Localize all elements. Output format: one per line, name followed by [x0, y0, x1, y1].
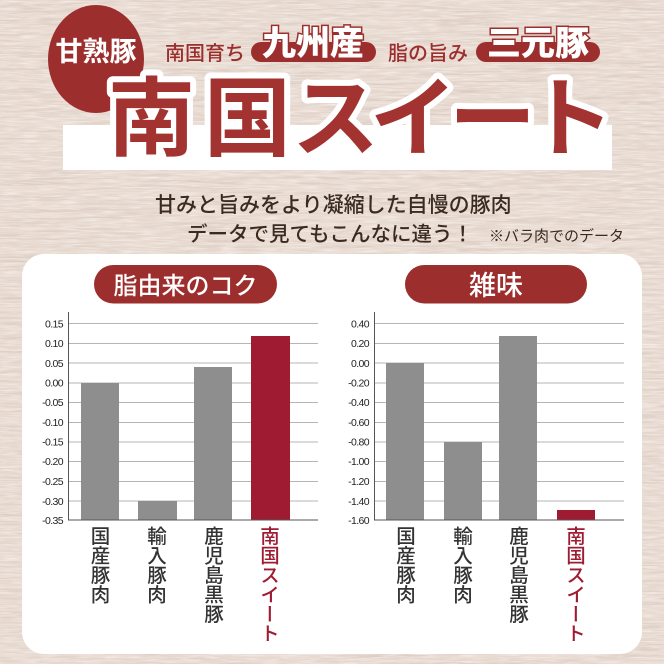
badge: 甘熟豚 [48, 5, 144, 113]
y axis labels: -0.60 [348, 417, 370, 429]
panel: charts card [22, 254, 642, 654]
x axis labels: 鹿児島黒豚 [504, 526, 534, 624]
y axis labels: -1.00 [348, 456, 370, 468]
x axis labels [392, 526, 590, 643]
x axis labels: 国産豚肉 [392, 526, 420, 604]
heading pill: 雑味: 雑味 [469, 264, 523, 303]
y axis labels: 0.20 [351, 338, 370, 350]
title: 南国スイート: 南国スイート [108, 49, 614, 175]
lead text: ※バラ肉でのデータ [489, 225, 624, 246]
y axis labels: -0.25 [42, 476, 64, 488]
y axis labels: 0.00 [351, 358, 370, 370]
x axis labels: 鹿児島黒豚 [200, 526, 228, 624]
x axis labels: 国産豚肉 [86, 526, 115, 604]
header white band [63, 125, 612, 170]
y axis labels: -0.40 [348, 397, 370, 409]
tagline: 脂の旨み 三元豚 [388, 16, 600, 66]
y axis labels: -0.80 [348, 436, 370, 448]
panel: right chart 雑味 [348, 264, 624, 643]
bars [81, 336, 290, 520]
y axis labels: -0.15 [42, 436, 64, 448]
x axis labels [86, 526, 284, 643]
y axis labels: 0.00 [45, 378, 64, 390]
y axis labels: -0.10 [42, 417, 64, 429]
y axis labels: 0.05 [45, 358, 64, 370]
y axis labels: -0.30 [42, 496, 64, 508]
y axis labels: -0.20 [348, 378, 370, 390]
x axis labels: 南国スイート [562, 526, 590, 643]
tagline: 南国育ち 九州産: 南国育ち [165, 37, 245, 66]
x axis labels: 南国スイート [256, 526, 284, 643]
panel: left chart 脂由来のコク [42, 265, 318, 643]
y axis labels: -0.35 [42, 515, 64, 527]
lead text: データで見てもこんなに違う！ [187, 217, 473, 247]
y axis labels [348, 318, 370, 527]
badge: 甘熟豚: 甘熟豚 [56, 30, 136, 69]
tagline: 南国育ち 九州産 [165, 16, 376, 66]
x axis labels: 輸入豚肉 [448, 526, 478, 604]
y axis labels: -1.20 [348, 476, 370, 488]
y axis labels: 0.10 [45, 338, 64, 350]
tagline: 脂の旨み 三元豚: 脂の旨み [388, 37, 468, 66]
lead text [155, 189, 624, 247]
x axis labels: 輸入豚肉 [142, 526, 172, 604]
bars [386, 336, 595, 520]
y axis labels: 0.40 [351, 318, 370, 330]
tagline: 南国育ち 九州産: 九州産 [262, 16, 364, 65]
y axis labels: -0.05 [42, 397, 64, 409]
tagline: 脂の旨み 三元豚: 三元豚 [487, 16, 589, 65]
y axis labels: -1.40 [348, 496, 370, 508]
y axis labels: -0.20 [42, 456, 64, 468]
y axis labels: -1.60 [348, 515, 370, 527]
heading pill: 雑味 [405, 264, 587, 304]
heading pill: 脂由来のコク: 脂由来のコク [114, 266, 258, 301]
lead text: 甘みと旨みをより凝縮した自慢の豚肉 [155, 189, 512, 219]
y axis labels: 0.15 [45, 318, 64, 330]
y axis labels [42, 318, 64, 527]
